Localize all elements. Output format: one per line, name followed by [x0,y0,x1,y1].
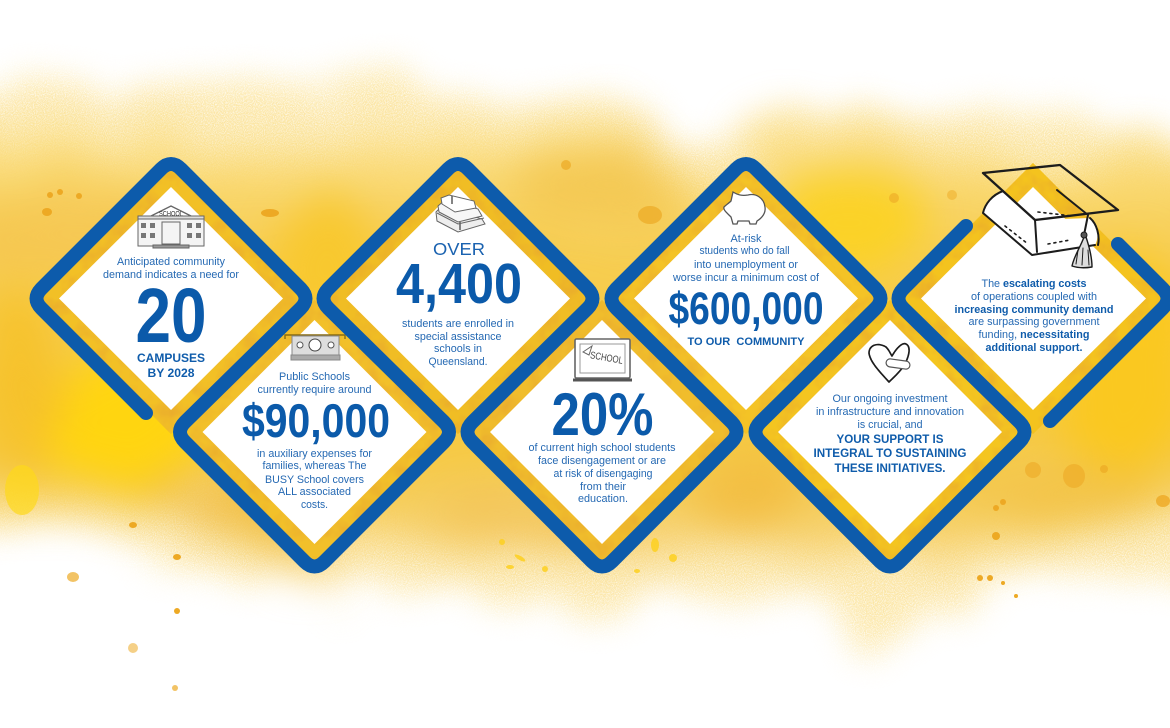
text: high school students [528,442,676,505]
icon: book stack [436,195,485,232]
text: at-risk students: students who do fall [700,245,790,257]
text: your support is integral: INTEGRAL TO SUSTAINING [814,446,966,460]
text: to our community: TO OUR COMMUNITY [688,336,805,348]
text: escalating costs: The escalating costs [982,278,1086,290]
text: students enrolled: special assistance [414,331,502,343]
stat: 4,400: 4,400 [396,252,522,316]
text: high school students: from their [580,481,626,493]
stat: 20: 20 [136,273,206,359]
text: students enrolled: schools in [434,343,482,355]
text: auxiliary expenses [257,448,372,511]
text: auxiliary expenses: in auxiliary expenses for [257,448,372,460]
text: at-risk students: into unemployment or [694,259,798,271]
text: your support is integral [814,432,966,475]
text: escalating costs [954,278,1114,354]
panel: escalating costs [898,163,1168,434]
text: high school students: of current high school students [528,442,676,454]
icon: graduation cap [983,165,1118,268]
panel: 20 percent disengaged [467,300,737,567]
panel: 90,000 dollars [180,300,449,567]
text: campuses by 2028 [137,351,205,380]
text: anticipated demand: demand indicates a need for [103,269,239,281]
text: auxiliary expenses: ALL associated [278,486,351,498]
text: escalating costs: of operations coupled with [971,291,1097,303]
text: anticipated demand: Anticipated community [117,256,226,268]
text: campuses by 2028: BY 2028 [148,366,195,380]
text: students enrolled: students are enrolled in [402,318,514,330]
icon: banknotes [285,335,345,360]
icon: school building: SCHOOL [159,211,183,218]
panel: over 4,400 students [323,163,593,434]
icon: laptop with school: SCHOOL [589,350,624,367]
text: escalating costs: increasing community demand [954,304,1114,316]
text: auxiliary expenses: families, whereas The [262,460,366,472]
text: auxiliary expenses: BUSY School covers [265,474,365,486]
icon: school building [138,206,204,248]
stat: 90,000 dollars: $90,000 [242,394,390,447]
text: students enrolled: Queensland. [428,356,488,368]
stat: 20 percent: 20% [552,381,654,448]
text: your support is integral: YOUR SUPPORT IS [836,432,944,446]
panel: 20 campuses [36,163,306,434]
text: high school students: face disengagement or are [538,455,666,467]
text: at-risk students: worse incur a minimum cost of [672,272,820,284]
stat: 600,000 dollars: $600,000 [668,283,824,334]
panel: 600,000 dollars [611,163,881,434]
text: public schools: currently require around [258,384,372,396]
text: public schools: Public Schools [279,371,351,383]
text: over: OVER [433,239,485,259]
icon: laptop with school [573,339,632,380]
text: high school students: at risk of disengaging [554,468,652,480]
icon: heart with bandage [869,344,910,382]
text: ongoing investment: is crucial, and [858,419,922,431]
text: at-risk students [672,233,820,284]
text: ongoing investment: in infrastructure and innovation [816,406,964,418]
text: campuses by 2028: CAMPUSES [137,351,205,365]
text: ongoing investment [816,393,964,431]
blue zigzag ribbon [36,164,1168,566]
text: public schools [258,371,372,396]
text: ongoing investment: Our ongoing investment [832,393,948,405]
text: at-risk students: At-risk [730,233,762,245]
text: your support is integral: THESE INITIATIVES. [834,461,946,475]
text: auxiliary expenses: costs. [301,499,328,511]
text: high school students: education. [578,493,628,505]
text: escalating costs: additional support. [986,342,1082,354]
text: students enrolled [402,318,514,368]
panel: your support [755,300,1025,567]
text: escalating costs: are surpassing government [968,316,1100,328]
text: anticipated demand [103,256,239,281]
icon: piggy bank [724,192,765,224]
text: escalating costs: funding, necessitating [978,329,1090,341]
